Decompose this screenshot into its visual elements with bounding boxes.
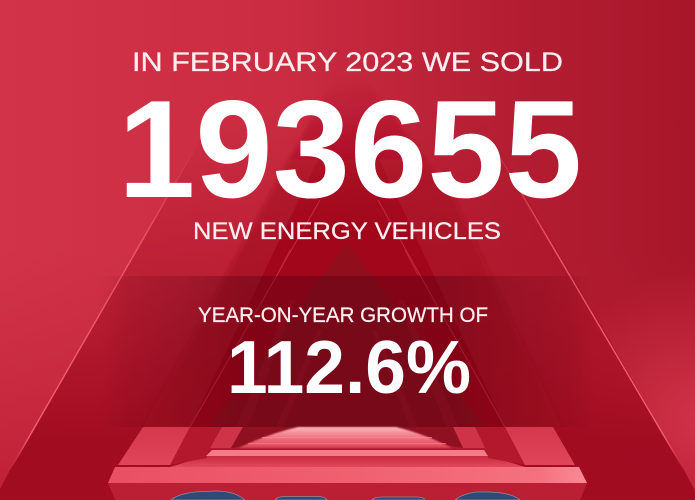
- far floor glow: [238, 427, 452, 448]
- front step: [108, 467, 587, 483]
- outer bright lines: [10, 140, 200, 470]
- inner dark pillars: [231, 427, 300, 448]
- cars: [171, 491, 520, 500]
- subheading: new energy vehicles: NEW ENERGY VEHICLES: [193, 218, 501, 245]
- inner thin lines: [190, 200, 505, 427]
- central peak: [209, 243, 485, 427]
- growth figure: 112.6%: [227, 325, 471, 409]
- foreground reflection: [108, 483, 587, 500]
- heading: sold in February 2023: IN FEBRUARY 2023 WE SOLD: [132, 47, 563, 77]
- receding inner pillars: [236, 300, 458, 427]
- second frame: [143, 54, 562, 427]
- third frame: [190, 95, 505, 427]
- big number: 193655: 193655: [118, 72, 582, 227]
- growth label: YEAR-ON-YEAR GROWTH OF: [198, 304, 488, 327]
- far steps: [262, 437, 432, 438]
- side floor slabs: [118, 427, 190, 465]
- pillars at floor level: [170, 427, 222, 465]
- translucent band behind growth figure: [100, 276, 595, 427]
- floor: [108, 427, 587, 500]
- mid floor: [190, 427, 505, 467]
- second step: [206, 450, 488, 456]
